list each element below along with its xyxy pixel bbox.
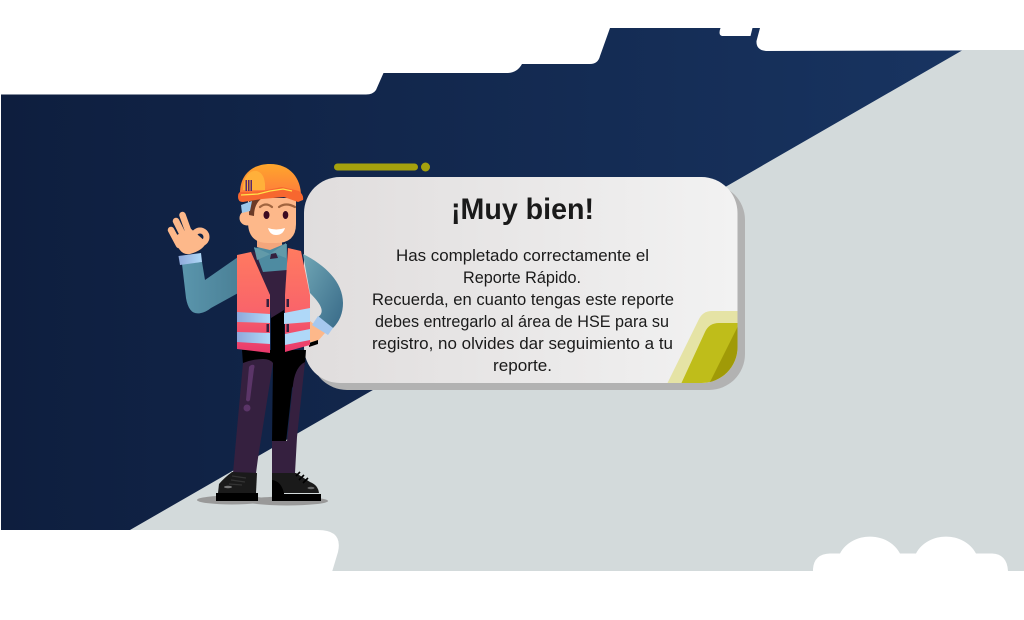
right hand xyxy=(309,321,325,342)
left cuff xyxy=(178,253,202,265)
legs xyxy=(233,359,305,473)
card corner accent xyxy=(667,311,738,384)
right arm xyxy=(303,254,343,328)
body text: reporte. xyxy=(493,357,552,375)
white shape bottom left xyxy=(0,530,339,572)
body text: Reporte Rápido. xyxy=(463,269,581,287)
panel: message card xyxy=(304,177,745,390)
card body xyxy=(304,177,738,383)
right cuff xyxy=(312,316,333,335)
left arm xyxy=(182,257,240,313)
boots xyxy=(216,472,321,501)
ground shadow xyxy=(197,496,328,506)
leg highlight xyxy=(244,365,254,412)
card shadow xyxy=(311,184,745,390)
body text: debes entregarlo al área de HSE para su xyxy=(375,313,669,331)
grey background shape xyxy=(100,50,1024,571)
safety vest xyxy=(237,248,310,353)
ok hand xyxy=(171,215,206,254)
heading: ¡Muy bien! xyxy=(451,193,594,226)
helmet xyxy=(238,164,303,202)
white cloud bottom right xyxy=(813,537,1008,572)
worker character xyxy=(171,164,343,506)
navy stepped background shape xyxy=(1,28,962,530)
right hand strap xyxy=(309,340,318,347)
torso shirt and apron xyxy=(250,243,291,352)
accent bar and dot xyxy=(334,162,430,172)
body text: registro, no olvides dar seguimiento a tu xyxy=(372,335,673,353)
body text: Recuerda, en cuanto tengas este reporte xyxy=(372,291,674,309)
body text xyxy=(372,247,674,375)
body text: Has completado correctamente el xyxy=(396,247,649,265)
head xyxy=(240,198,296,250)
black apron lower xyxy=(242,350,306,442)
